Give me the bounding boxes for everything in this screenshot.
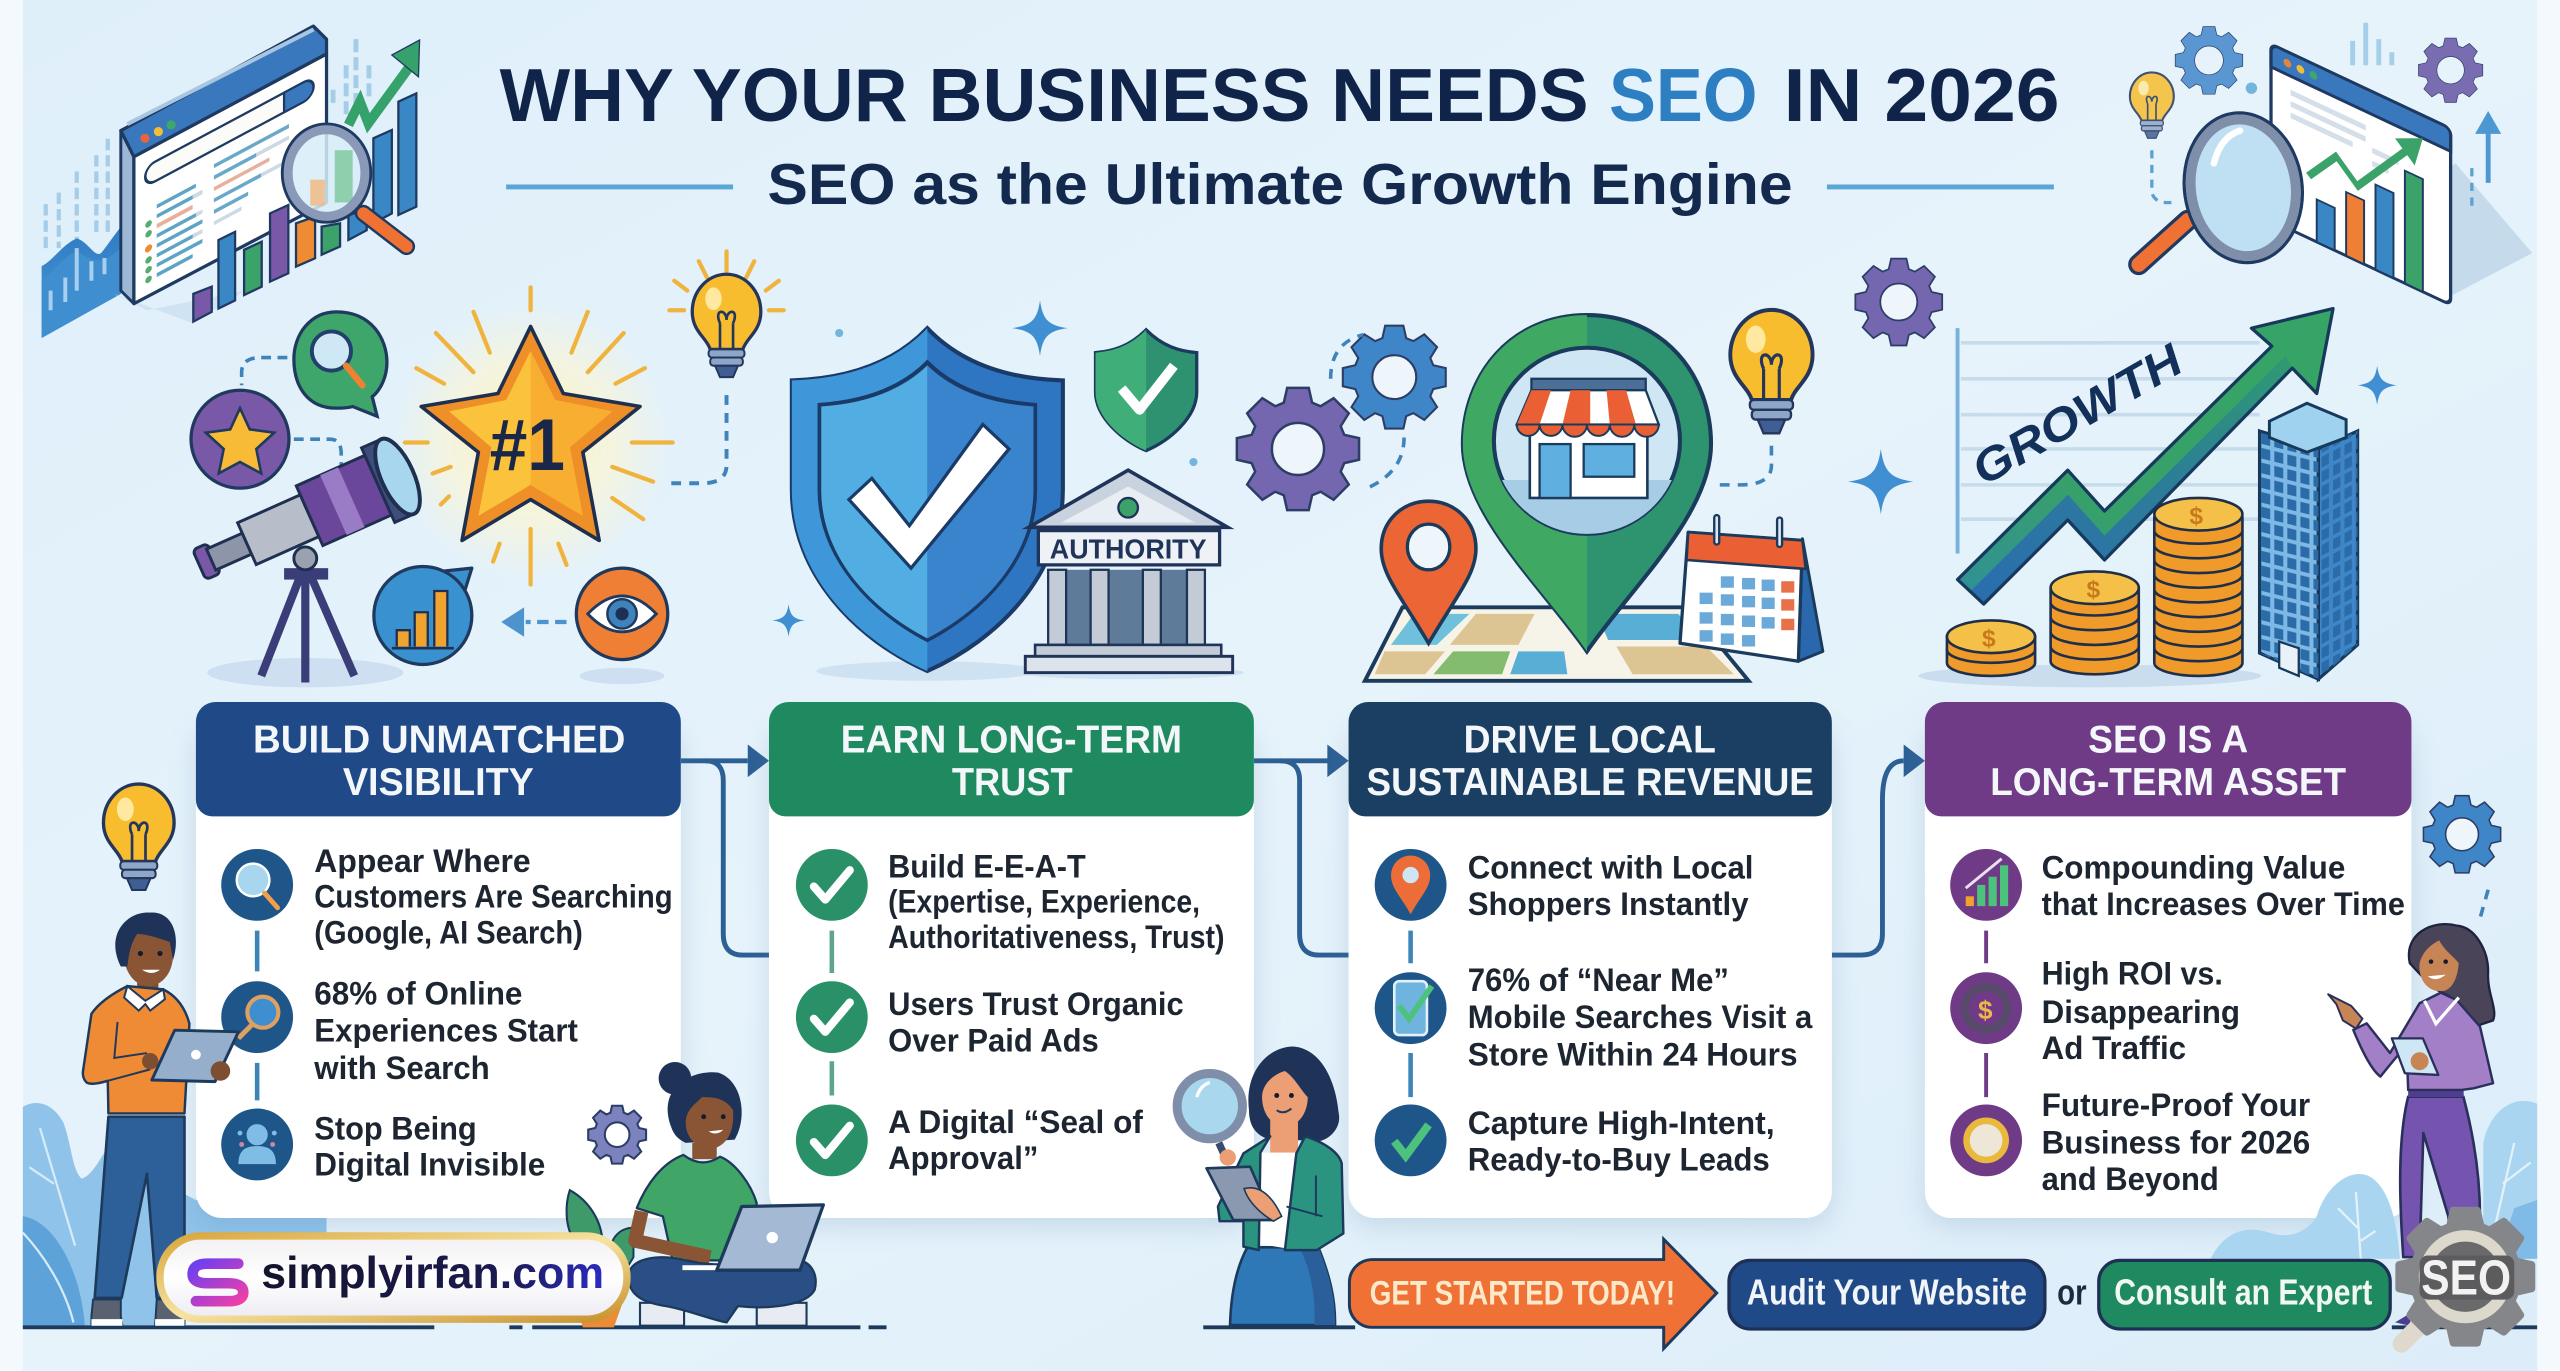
heading bbox=[1367, 719, 1814, 804]
text block: build e-e-a-t bbox=[888, 847, 1224, 955]
heading: EARN LONG-TERM bbox=[841, 719, 1182, 762]
illustration: office tower bbox=[2260, 403, 2358, 679]
text block: 68% of online experiences: 68% of Online bbox=[314, 975, 522, 1012]
text block: 76% near me bbox=[1468, 961, 1813, 1073]
icon: pin bbox=[1375, 849, 1447, 1097]
text block: build e-e-a-t: Authoritativeness, Trust) bbox=[888, 918, 1224, 955]
icon: magnifier bbox=[221, 931, 293, 1100]
text block: capture high-intent leads: Capture High-Intent, bbox=[1468, 1104, 1775, 1141]
button: audit your website bbox=[1729, 1260, 2045, 1329]
heading bbox=[253, 719, 625, 804]
illustration: lightbulb bbox=[1730, 310, 1813, 433]
illustration: map with orange pin bbox=[1365, 501, 1749, 681]
illustration: growth chart with arrow bbox=[1958, 309, 2333, 604]
text block: capture high-intent leads bbox=[1468, 1104, 1775, 1178]
illustration: growth chart with arrow: GROWTH bbox=[1963, 334, 2192, 495]
text block: high roi: Disappearing bbox=[2042, 993, 2240, 1030]
text block: build e-e-a-t: (Expertise, Experience, bbox=[888, 883, 1200, 920]
text: or: or bbox=[2057, 1271, 2087, 1312]
icon: phone check bbox=[1375, 972, 1447, 1044]
text block: stop being digital invisible: Digital Invisible bbox=[314, 1145, 545, 1182]
panel: drive local sustainable revenue bbox=[1349, 702, 1832, 1218]
illustration: magnifier over analytics browser, top right bbox=[2130, 23, 2532, 305]
heading: SEO IS A bbox=[2088, 719, 2248, 762]
text block: 76% near me: Mobile Searches Visit a bbox=[1468, 998, 1813, 1035]
text block: seal of approval: Approval” bbox=[888, 1139, 1038, 1176]
illustration: woman with magnifier and tablet bbox=[1176, 1047, 1343, 1325]
flow connectors between cards bbox=[681, 744, 1925, 955]
button: audit your website: Audit Your Website bbox=[1747, 1271, 2027, 1312]
icon: search bbox=[221, 849, 293, 921]
illustration: trust shield bbox=[792, 328, 1063, 681]
heading bbox=[841, 719, 1182, 804]
icon: person bbox=[221, 1109, 293, 1180]
illustration: coin stacks: $ bbox=[2087, 577, 2101, 604]
text block: 76% near me: Store Within 24 Hours bbox=[1468, 1036, 1798, 1073]
illustration: person with tablet and bulb bbox=[83, 784, 238, 1326]
illustration: coin stacks: $ bbox=[1982, 626, 1996, 653]
call to action: get started today arrow: GET STARTED TODAY! bbox=[1370, 1274, 1675, 1312]
subtitle: SEO as the Ultimate Growth Engine bbox=[767, 153, 1793, 217]
illustration: lightbulb with dashed connector bbox=[666, 251, 784, 483]
text block: stop being digital invisible bbox=[314, 1110, 545, 1182]
text block: future-proof: and Beyond bbox=[2042, 1160, 2219, 1197]
logo: simplyirfan.com: simplyirfan.com bbox=[261, 1249, 604, 1298]
illustration: browser with analytics, top left bbox=[42, 26, 420, 338]
text block: high roi: Ad Traffic bbox=[2042, 1029, 2186, 1066]
illustration: eye badge with arrow bbox=[501, 568, 668, 684]
text block: users trust organic: Users Trust Organic bbox=[888, 985, 1184, 1022]
illustration: authority building bbox=[1016, 470, 1244, 679]
text block: appear where customers are searching bbox=[314, 842, 673, 951]
text block: appear where customers are searching: Appear Where bbox=[314, 842, 531, 879]
text block: connect with local shoppers: Connect with Local bbox=[1468, 848, 1753, 885]
text block: connect with local shoppers bbox=[1468, 848, 1753, 922]
badge: seo gear bbox=[2395, 1211, 2531, 1344]
title: WHY YOUR BUSINESS NEEDS bbox=[500, 53, 1589, 137]
text block: users trust organic bbox=[888, 985, 1184, 1058]
heading bbox=[1990, 719, 2346, 804]
text block: compounding value: that Increases Over Time bbox=[2042, 885, 2405, 922]
illustration: #1 star visibility: #1 bbox=[490, 403, 565, 486]
illustration: star badge bbox=[191, 390, 341, 488]
text block: future-proof: Future-Proof Your bbox=[2042, 1086, 2310, 1123]
heading: VISIBILITY bbox=[343, 761, 534, 804]
plants behind right person bbox=[2211, 1101, 2537, 1259]
text block: high roi: High ROI vs. bbox=[2042, 954, 2223, 991]
panel: build unmatched visibility bbox=[196, 702, 681, 1218]
panel: seo is a long-term asset bbox=[1925, 702, 2411, 1218]
icon: dollar cycle bbox=[1950, 972, 2022, 1044]
illustration: #1 star visibility bbox=[392, 287, 673, 584]
ground line bbox=[23, 1326, 2537, 1329]
text block: future-proof bbox=[2042, 1086, 2310, 1197]
illustration: calendar bbox=[1680, 518, 1823, 661]
title: SEO bbox=[1609, 53, 1758, 137]
logo: simplyirfan.com bbox=[160, 1236, 627, 1319]
text block: connect with local shoppers: Shoppers Instantly bbox=[1468, 885, 1749, 922]
illustration: sitting person with laptop bbox=[567, 1062, 823, 1327]
text block: 68% of online experiences: with Search bbox=[313, 1049, 490, 1086]
text block: 68% of online experiences bbox=[313, 975, 578, 1086]
illustration: big location pin with shop bbox=[1463, 315, 1711, 651]
call to action: get started today arrow bbox=[1349, 1239, 1717, 1349]
subtitle bbox=[506, 153, 2054, 217]
text block: compounding value: Compounding Value bbox=[2042, 848, 2345, 885]
illustration: small green shield bbox=[1096, 330, 1197, 451]
icon: dollar cycle: $ bbox=[1978, 995, 1993, 1025]
icon: compounding chart bbox=[1950, 849, 2022, 1097]
heading: BUILD UNMATCHED bbox=[253, 719, 625, 762]
button: consult an expert bbox=[2099, 1260, 2390, 1329]
text block: seal of approval: A Digital “Seal of bbox=[888, 1103, 1143, 1140]
text block: seal of approval bbox=[888, 1103, 1143, 1176]
text block: 76% near me: 76% of “Near Me” bbox=[1468, 961, 1729, 998]
text block: appear where customers are searching: Customers Are Searching bbox=[314, 878, 673, 915]
illustration: chart bubble bbox=[374, 567, 472, 664]
illustration: coin stacks bbox=[1918, 498, 2261, 687]
text block: build e-e-a-t: Build E-E-A-T bbox=[888, 847, 1086, 884]
text block: users trust organic: Over Paid Ads bbox=[888, 1021, 1099, 1058]
dashed connectors around gears bbox=[1331, 335, 1771, 490]
illustration: gears bbox=[1237, 27, 2483, 510]
icon: future-proof seal bbox=[1950, 1104, 2022, 1176]
gear above right person bbox=[2423, 796, 2501, 924]
button: consult an expert: Consult an Expert bbox=[2114, 1271, 2372, 1312]
text block: appear where customers are searching: (Google, AI Search) bbox=[314, 914, 583, 951]
icon: check bbox=[1375, 1104, 1447, 1176]
text block: stop being digital invisible: Stop Being bbox=[314, 1110, 477, 1147]
sparkles near growth chart bbox=[1848, 366, 2397, 514]
heading: LONG-TERM ASSET bbox=[1990, 761, 2346, 804]
illustration: authority building: AUTHORITY bbox=[1050, 533, 1207, 564]
illustration: telescope bbox=[183, 433, 429, 687]
icon: gear bbox=[588, 1106, 646, 1164]
panel: earn long-term trust bbox=[769, 702, 1254, 1218]
plants behind left person bbox=[23, 1103, 327, 1327]
heading: DRIVE LOCAL bbox=[1464, 719, 1716, 762]
badge: seo gear: SEO bbox=[2421, 1252, 2511, 1306]
text block: 68% of online experiences: Experiences Start bbox=[314, 1012, 578, 1049]
icons: check marks bbox=[796, 849, 868, 1176]
illustration: coin stacks: $ bbox=[2189, 503, 2203, 530]
title: IN 2026 bbox=[1784, 53, 2060, 137]
illustration: search bubble bbox=[242, 312, 387, 416]
illustration: woman pointing with tablet bbox=[2328, 924, 2494, 1257]
text block: compounding value bbox=[2042, 848, 2405, 922]
sparkles around shield bbox=[772, 300, 1198, 637]
heading: SUSTAINABLE REVENUE bbox=[1367, 761, 1814, 804]
text block: future-proof: Business for 2026 bbox=[2042, 1124, 2310, 1161]
text block: capture high-intent leads: Ready-to-Buy Leads bbox=[1468, 1141, 1770, 1178]
heading: TRUST bbox=[952, 761, 1073, 804]
text block: high roi bbox=[2042, 954, 2240, 1066]
